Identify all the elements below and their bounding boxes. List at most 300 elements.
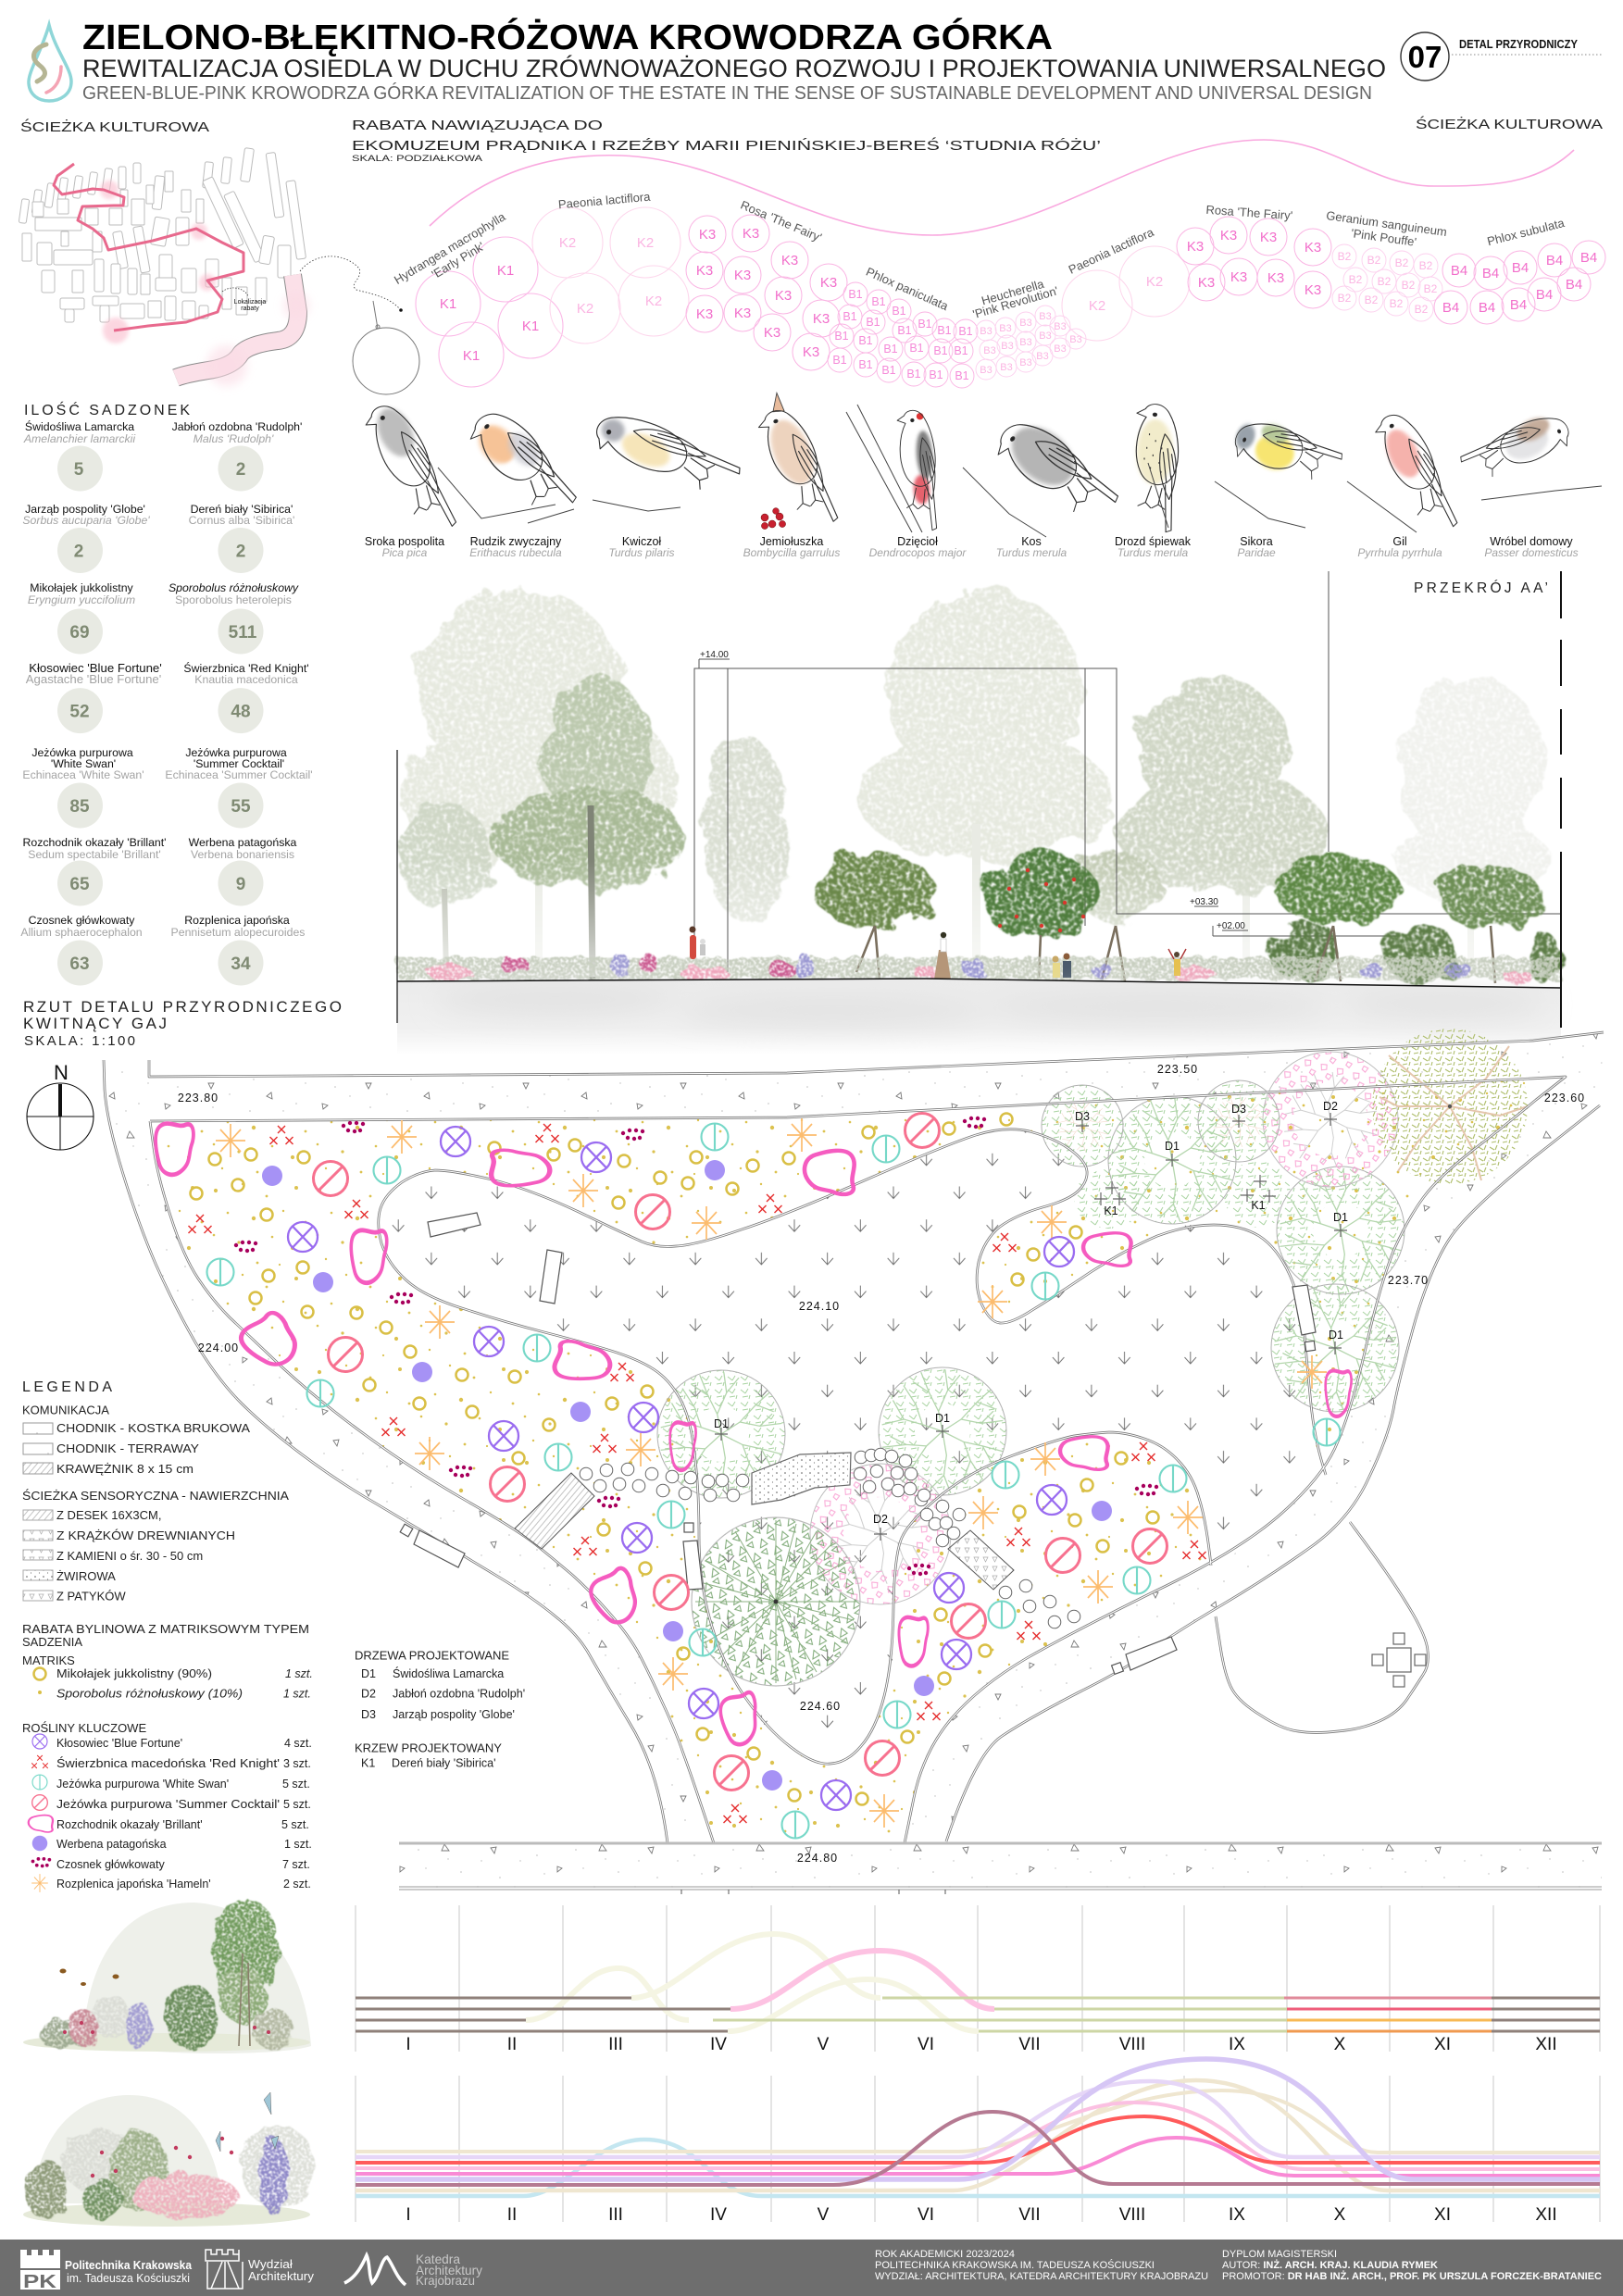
month labels: V bbox=[818, 2205, 830, 2225]
bed plan: planting circles: B3 bbox=[1001, 341, 1014, 352]
polish names: Werbena patagońska bbox=[189, 836, 296, 849]
planting codes: K1 bbox=[497, 263, 514, 279]
month labels: VII bbox=[1018, 2205, 1041, 2225]
month labels bbox=[406, 2205, 1557, 2225]
count numbers: 2 bbox=[236, 460, 245, 480]
month labels: X bbox=[1334, 2035, 1346, 2054]
heading: plan detail bbox=[23, 998, 342, 1049]
species names: Heucherella bbox=[980, 277, 1046, 307]
series bbox=[356, 2059, 1600, 2196]
latin names: Knautia macedonica bbox=[194, 673, 298, 686]
elevation labels: 223.70 bbox=[1388, 1274, 1429, 1287]
legend: RABATA BYLINOWA Z MATRIKSOWYM TYPEM bbox=[22, 1622, 309, 1636]
polish names: 'White Swan' bbox=[51, 757, 116, 770]
legend: Z DESEK 16X3CM, bbox=[56, 1508, 161, 1522]
north arrow: N bbox=[54, 1061, 69, 1084]
planting codes: K3 bbox=[734, 306, 751, 321]
legend: KOMUNIKACJA bbox=[22, 1404, 109, 1416]
bird: robin bbox=[465, 401, 581, 527]
bird: waxwing bbox=[749, 388, 843, 534]
logo: Wydzial Architektury: Architektury bbox=[248, 2269, 315, 2283]
legend: Werbena patagońska bbox=[56, 1838, 167, 1851]
month labels: I bbox=[406, 2205, 411, 2225]
planting codes: K3 bbox=[1198, 275, 1215, 291]
benches bbox=[400, 1213, 1316, 1674]
legend: 2 szt. bbox=[283, 1878, 311, 1890]
key plant legend icons bbox=[29, 1734, 53, 1892]
bird latin names: Turdus merula bbox=[1117, 546, 1189, 559]
south strip bbox=[399, 1843, 1602, 1894]
polish names: Sporobolus różnołuskowy bbox=[169, 581, 299, 594]
latin names: Sporobolus heterolepis bbox=[175, 593, 292, 606]
latin names bbox=[20, 432, 313, 939]
lawn with grass arrows bbox=[376, 1126, 1325, 1766]
logo: Wydzial Architektury: Wydział bbox=[248, 2257, 293, 2271]
bird: fieldfare bbox=[590, 404, 743, 505]
count numbers: 85 bbox=[69, 797, 90, 817]
pink hump bbox=[730, 1951, 994, 2009]
elevation labels: 223.60 bbox=[1544, 1092, 1585, 1104]
logo: Politechnika Krakowska bbox=[20, 2250, 193, 2292]
bars autumn colours bbox=[1284, 1998, 1492, 2031]
planting codes: B4 bbox=[1512, 260, 1529, 276]
planting codes: K3 bbox=[813, 311, 830, 327]
polish names: Rozplenica japońska bbox=[184, 914, 290, 927]
keyhole circle bbox=[353, 301, 419, 394]
legend: Mikołajek jukkolistny (90%) bbox=[56, 1667, 212, 1680]
tree codes: K1 bbox=[1104, 1204, 1118, 1217]
month labels: II bbox=[507, 2035, 517, 2054]
bed plan: planting circles: K2 bbox=[637, 235, 654, 251]
latin names: Echinacea 'White Swan' bbox=[22, 768, 144, 781]
legend: Jeżówka purpurowa 'Summer Cocktail' bbox=[56, 1798, 280, 1811]
month labels: XII bbox=[1535, 2205, 1557, 2225]
footer bbox=[0, 2240, 1623, 2296]
planting codes: K3 bbox=[1305, 282, 1321, 298]
planting codes: K3 bbox=[1187, 239, 1204, 255]
tree codes: D1 bbox=[1329, 1329, 1343, 1341]
branches bbox=[438, 463, 1602, 537]
bed plan: planting circles: B1 bbox=[954, 344, 968, 357]
month labels: VIII bbox=[1119, 2035, 1145, 2054]
footer text: DYPLOM MAGISTERSKI bbox=[1222, 2249, 1337, 2260]
polish names: Jeżówka purpurowa bbox=[31, 746, 133, 759]
section AA bbox=[397, 571, 1563, 1055]
count circles bbox=[57, 446, 263, 985]
levels bbox=[700, 650, 1245, 931]
logo: Katedra bbox=[344, 2252, 482, 2288]
location map: rabaty bbox=[241, 306, 259, 312]
species names: Paeonia lactiflora bbox=[1067, 225, 1156, 277]
bed plan: planting circles: B1 bbox=[848, 288, 863, 301]
legend: MATRIKS bbox=[22, 1653, 75, 1667]
planting codes bbox=[440, 226, 1597, 364]
count numbers: 55 bbox=[231, 797, 251, 817]
bed plan: planting circles: B2 bbox=[1367, 254, 1381, 267]
month labels: VII bbox=[1018, 2035, 1041, 2054]
legend: 1 szt. bbox=[283, 1688, 311, 1701]
month labels: XII bbox=[1535, 2035, 1557, 2054]
latin names: Cornus alba 'Sibirica' bbox=[189, 514, 294, 527]
bed plan: planting circles: B1 bbox=[937, 324, 952, 337]
month labels: I bbox=[406, 2035, 411, 2054]
legend: ŚCIEŻKA SENSORYCZNA - NAWIERZCHNIA bbox=[22, 1489, 289, 1503]
legend: 1 szt. bbox=[284, 1838, 312, 1851]
near trees bbox=[814, 853, 1563, 984]
bed plan: planting circles: B3 bbox=[1019, 337, 1032, 348]
month labels: IX bbox=[1229, 2035, 1245, 2054]
heading: cultural path left: ŚCIEŻKA KULTUROWA bbox=[20, 119, 209, 135]
legend bbox=[22, 1379, 313, 1892]
footer text bbox=[875, 2249, 1602, 2282]
species names: 'Pink Revolution' bbox=[971, 283, 1060, 321]
second trunk bbox=[444, 889, 446, 977]
elevation labels: 223.80 bbox=[178, 1092, 218, 1104]
bird names: Wróbel domowy bbox=[1490, 535, 1573, 548]
sensory path: stones bbox=[580, 1448, 1080, 1628]
legend: Z KAMIENI o śr. 30 - 50 cm bbox=[56, 1549, 203, 1563]
far trees bbox=[400, 588, 1551, 903]
bird latin names: Erithacus rubecula bbox=[469, 546, 562, 559]
bird latin names: Dendrocopos major bbox=[869, 546, 967, 559]
heading: plan detail: RZUT DETALU PRZYRODNICZEGO bbox=[23, 998, 342, 1016]
pale humps bbox=[526, 1934, 979, 2031]
K1 group bbox=[416, 237, 563, 387]
planting codes: B4 bbox=[1479, 300, 1495, 316]
polish names: Mikołajek jukkolistny bbox=[30, 581, 134, 594]
illustration: spring planting bbox=[23, 1898, 311, 2053]
species names: Phlox paniculata bbox=[864, 265, 951, 313]
bed plan: planting circles: B1 bbox=[883, 343, 898, 356]
bird names: Jemiołuszka bbox=[760, 535, 823, 548]
bed plan: planting circles: B1 bbox=[858, 334, 873, 347]
latin names: Verbena bonariensis bbox=[191, 848, 294, 861]
legend: CHODNIK - TERRAWAY bbox=[56, 1441, 199, 1455]
sensory path: gravel bbox=[752, 1453, 851, 1504]
bird: tit bbox=[1230, 414, 1345, 491]
bed plan: planting circles: B3 bbox=[1039, 331, 1052, 342]
planting codes: K1 bbox=[440, 296, 456, 312]
legend: trees and shrubs: Dereń biały 'Sibirica' bbox=[392, 1757, 495, 1770]
mist overlay bbox=[398, 861, 1560, 977]
Swierzbnica red crosses bbox=[189, 1124, 1205, 1823]
Klosowiec purple bbox=[288, 1127, 1074, 1810]
bed plan: planting circles: B3 bbox=[1054, 343, 1067, 355]
matrix plants rings bbox=[191, 1113, 1159, 1805]
legend: trees and shrubs: Świdośliwa Lamarcka bbox=[393, 1666, 504, 1680]
species names: Geranium sanguineum bbox=[1325, 208, 1448, 239]
far trunks bbox=[535, 824, 1474, 977]
species names bbox=[392, 190, 1567, 321]
bird names: Sikora bbox=[1240, 535, 1273, 548]
elevation labels: 224.60 bbox=[800, 1700, 841, 1713]
birds bbox=[361, 388, 1602, 559]
legend: 3 szt. bbox=[283, 1757, 311, 1770]
logo: drop bbox=[29, 25, 71, 101]
plan view bbox=[104, 1029, 1604, 1894]
logo: Politechnika Krakowska: Politechnika Krakowska bbox=[65, 2258, 193, 2272]
grid bbox=[356, 2076, 1600, 2222]
month labels: III bbox=[608, 2035, 623, 2054]
B2 group bbox=[1332, 244, 1442, 321]
bird latin names: Passer domesticus bbox=[1484, 546, 1579, 559]
bed plan: planting circles: K2 bbox=[1146, 274, 1163, 290]
bed plan: planting circles: B1 bbox=[866, 316, 880, 329]
species names: Paeonia lactiflora bbox=[557, 190, 652, 211]
legend: Sporobolus różnołuskowy (10%) bbox=[56, 1688, 243, 1701]
count numbers: 65 bbox=[69, 875, 90, 894]
legend: trees and shrubs: D1 bbox=[361, 1667, 376, 1680]
logo: Katedra: Krajobrazu bbox=[416, 2273, 475, 2288]
planting codes: K3 bbox=[1220, 228, 1237, 243]
planting codes: K3 bbox=[696, 306, 713, 322]
polish names: Świdośliwa Lamarcka bbox=[25, 419, 134, 433]
planting codes: K3 bbox=[1230, 269, 1247, 285]
bed plan: planting circles: B3 bbox=[1000, 362, 1013, 373]
mid tree trunk bbox=[591, 805, 593, 980]
Werbena filled circles bbox=[262, 1160, 1112, 1791]
legend: trees and shrubs: KRZEW PROJEKTOWANY bbox=[355, 1741, 502, 1755]
month labels: XI bbox=[1434, 2035, 1451, 2054]
bird names: Kos bbox=[1021, 535, 1042, 548]
month labels: X bbox=[1334, 2205, 1346, 2225]
title block: GREEN-BLUE-PINK KROWODRZA GÓRKA REVITALIZATION OF THE ESTATE IN THE SENSE OF SUSTAINABLE DEVELOPMENT AND UNIVERSAL DESIGN bbox=[82, 82, 1372, 104]
month labels: VI bbox=[918, 2205, 934, 2225]
tree codes: D1 bbox=[714, 1417, 729, 1430]
illustration: summer planting bbox=[23, 2092, 315, 2227]
latin names: Echinacea 'Summer Cocktail' bbox=[165, 768, 313, 781]
board number badge: 07 bbox=[1408, 40, 1442, 74]
month labels: IV bbox=[710, 2205, 727, 2225]
polish names: Czosnek główkowaty bbox=[29, 914, 135, 927]
legend: 5 szt. bbox=[281, 1818, 309, 1831]
legend: 5 szt. bbox=[283, 1798, 311, 1811]
bed plan: planting circles: B1 bbox=[834, 330, 849, 343]
olive tree top right bbox=[1372, 1029, 1528, 1184]
Jezowka White Swan bbox=[207, 1124, 1341, 1839]
tree codes: D2 bbox=[1323, 1100, 1338, 1113]
elevation labels bbox=[178, 1063, 1585, 1865]
count numbers: 48 bbox=[231, 703, 251, 722]
chart: bloom calendar bottom bbox=[356, 2059, 1600, 2225]
bird: sparrow bbox=[1457, 407, 1574, 489]
latin names: Sedum spectabile 'Brillant' bbox=[28, 848, 161, 861]
logo: Katedra: Katedra bbox=[416, 2252, 460, 2266]
heading: flower bed: SKALA: PODZIAŁKOWA bbox=[352, 154, 483, 164]
bed plan: planting circles: B2 bbox=[1395, 256, 1409, 269]
Rozplenica stars bbox=[216, 1118, 1327, 1828]
legend: trees and shrubs: D2 bbox=[361, 1688, 376, 1701]
species names: 'Pink Pouffe' bbox=[1350, 226, 1417, 249]
bird latin names: Pyrrhula pyrrhula bbox=[1357, 546, 1442, 559]
bed plan: planting circles: B1 bbox=[909, 342, 924, 355]
month labels bbox=[406, 2035, 1557, 2054]
bed plan: planting circles: B2 bbox=[1365, 293, 1379, 306]
bed plan: planting circles: B2 bbox=[1402, 279, 1416, 292]
legend: CHODNIK - KOSTKA BRUKOWA bbox=[56, 1421, 250, 1435]
bed plan: planting circles: B3 bbox=[999, 323, 1012, 334]
species names: 'Early Pink' bbox=[430, 239, 487, 281]
bed plan: planting circles: B1 bbox=[906, 368, 921, 381]
legend: Czosnek główkowaty bbox=[56, 1858, 165, 1871]
bed plan: planting circles: B1 bbox=[955, 369, 969, 382]
bird names: Sroka pospolita bbox=[365, 535, 444, 548]
bed plan: planting circles: B2 bbox=[1338, 250, 1352, 263]
bed plan: planting circles: B3 bbox=[1039, 311, 1052, 322]
polish names: Jarząb pospolity 'Globe' bbox=[25, 503, 145, 516]
planting codes: K3 bbox=[803, 344, 819, 360]
bed plan: planting circles: B2 bbox=[1378, 275, 1392, 288]
Czosnek dots bbox=[234, 1117, 1158, 1576]
logo: Wydzial Architektury bbox=[206, 2250, 315, 2289]
planting codes: K3 bbox=[1305, 240, 1321, 256]
heading: plan detail: KWITNĄCY GAJ bbox=[23, 1015, 167, 1032]
board number badge: DETAL PRZYRODNICZY bbox=[1459, 38, 1579, 51]
legend: 7 szt. bbox=[282, 1858, 310, 1871]
month labels: IV bbox=[710, 2035, 727, 2054]
bed plan: planting circles bbox=[353, 140, 1605, 394]
count numbers: 9 bbox=[236, 875, 245, 894]
tree codes bbox=[714, 1100, 1348, 1526]
latin names: Amelanchier lamarckii bbox=[23, 432, 136, 445]
legend: Rozplenica japońska 'Hameln' bbox=[56, 1878, 211, 1890]
bed plan: planting circles: B1 bbox=[933, 344, 948, 357]
bed plan: planting circles: K2 bbox=[1089, 298, 1105, 314]
latin names: Pennisetum alopecuroides bbox=[171, 926, 305, 939]
K2 group bbox=[532, 207, 1190, 343]
swatches: communication bbox=[23, 1423, 53, 1474]
bed plan: planting circles: B2 bbox=[1419, 259, 1433, 272]
bird: woodpecker bbox=[896, 409, 941, 532]
trees D2 bbox=[810, 1052, 1398, 1604]
tree circles D1 bbox=[657, 1096, 1405, 1498]
planting codes: B4 bbox=[1536, 287, 1553, 303]
planting codes: K1 bbox=[463, 348, 480, 364]
panel: plant quantities bbox=[20, 401, 313, 985]
legend: trees and shrubs: K1 bbox=[361, 1757, 375, 1770]
title block: ZIELONO-BŁĘKITNO-RÓŻOWA KROWODRZA GÓRKA bbox=[82, 17, 1053, 57]
mid trees bbox=[398, 676, 1329, 922]
tree codes: D1 bbox=[935, 1412, 950, 1425]
species names: Rosa 'The Fairy' bbox=[739, 198, 824, 244]
cut lines bbox=[396, 750, 398, 1023]
big triangle-leaf tree bbox=[692, 1517, 860, 1686]
B4 group bbox=[1434, 241, 1605, 324]
Rozchodnik blobs bbox=[156, 1124, 1352, 1749]
bed plan: planting circles: B1 bbox=[918, 318, 932, 331]
bed plan: planting circles: B1 bbox=[881, 364, 896, 377]
planting codes: B4 bbox=[1510, 297, 1527, 313]
count numbers: 5 bbox=[74, 460, 84, 480]
count numbers: 2 bbox=[236, 543, 245, 561]
trunk bbox=[846, 405, 922, 532]
elevation labels: 223.50 bbox=[1157, 1063, 1198, 1076]
polish names bbox=[22, 419, 309, 927]
planting codes: B4 bbox=[1546, 253, 1563, 268]
planting codes: K3 bbox=[781, 253, 798, 268]
planting codes: K3 bbox=[764, 325, 780, 341]
sidewalk and bed edges bbox=[104, 1032, 1604, 1843]
planting codes: K1 bbox=[522, 318, 539, 334]
bird: bullfinch bbox=[1372, 406, 1462, 540]
polish names: Jeżówka purpurowa bbox=[185, 746, 287, 759]
bed plan: planting circles: B1 bbox=[871, 295, 886, 308]
month labels: III bbox=[608, 2205, 623, 2225]
species names: Rosa 'The Fairy' bbox=[1205, 203, 1293, 222]
polish names: Jabłoń ozdobna 'Rudolph' bbox=[172, 420, 302, 433]
month labels: VIII bbox=[1119, 2205, 1145, 2225]
trees D1 bbox=[657, 1096, 1405, 1498]
count numbers bbox=[69, 460, 257, 974]
wave line bbox=[430, 140, 1574, 235]
elevation labels: 224.10 bbox=[799, 1300, 840, 1313]
B1 group bbox=[828, 282, 978, 388]
bird latin names: Turdus merula bbox=[996, 546, 1067, 559]
planting codes: K3 bbox=[696, 263, 713, 279]
count numbers: 52 bbox=[69, 703, 90, 722]
latin names: Agastache 'Blue Fortune' bbox=[26, 672, 161, 686]
footer text: WYDZIAŁ: ARCHITEKTURA, KATEDRA ARCHITEKTURY KRAJOBRAZU bbox=[875, 2271, 1208, 2282]
footer text: PROMOTOR: DR HAB INŻ. ARCH., PROF. PK URSZULA FORCZEK-BRATANIEC bbox=[1222, 2270, 1602, 2282]
bed plan: planting circles: B3 bbox=[1019, 357, 1032, 368]
bars green bbox=[713, 1998, 1287, 2031]
bird names: Drozd śpiewak bbox=[1115, 535, 1192, 548]
ground bbox=[397, 979, 1561, 1055]
sensory path: sticks bbox=[948, 1530, 1014, 1590]
count numbers: 2 bbox=[74, 543, 83, 561]
legend: LEGENDA bbox=[22, 1379, 112, 1395]
elevation labels: 224.00 bbox=[198, 1341, 239, 1354]
board number badge bbox=[1401, 32, 1604, 81]
bed plan: planting circles: B3 bbox=[983, 345, 996, 356]
planting codes: B4 bbox=[1566, 277, 1582, 293]
levels: +03.30 bbox=[1190, 897, 1218, 907]
ground line bbox=[397, 979, 1561, 988]
levels: +02.00 bbox=[1217, 921, 1245, 931]
count numbers: 34 bbox=[231, 955, 251, 974]
panel: plant quantities: ILOŚĆ SADZONEK bbox=[24, 401, 193, 418]
bed plan: planting circles: B2 bbox=[1424, 282, 1438, 295]
bed plan: planting circles: B3 bbox=[1069, 334, 1082, 345]
bed plan: planting circles: B1 bbox=[958, 325, 973, 338]
legend: KRAWĘŻNIK 8 x 15 cm bbox=[56, 1462, 194, 1476]
shrubs K1 bbox=[1074, 1161, 1291, 1229]
month labels: VI bbox=[918, 2035, 934, 2054]
sensory path: boards bbox=[515, 1473, 594, 1549]
terrace table bbox=[1372, 1633, 1426, 1687]
bed plan: planting circles: B1 bbox=[897, 324, 912, 337]
bed plan: planting circles: B2 bbox=[1415, 303, 1429, 316]
bed plan: planting circles: B1 bbox=[929, 368, 943, 381]
count numbers: 511 bbox=[229, 623, 257, 643]
figures bbox=[689, 926, 1186, 980]
legend: Z KRĄŻKÓW DREWNIANYCH bbox=[56, 1529, 235, 1542]
legend: SADZENIA bbox=[22, 1635, 82, 1649]
berries bbox=[761, 508, 786, 530]
heading: section: PRZEKRÓJ AA’ bbox=[1414, 580, 1550, 596]
legend: trees and shrubs: DRZEWA PROJEKTOWANE bbox=[355, 1648, 509, 1663]
bed dots bbox=[150, 1077, 1566, 1843]
tree codes: D2 bbox=[873, 1513, 888, 1526]
legend: trees and shrubs: Jabłoń ozdobna 'Rudolph' bbox=[393, 1688, 525, 1701]
heading: flower bed: RABATA NAWIĄZUJĄCA DO bbox=[352, 118, 603, 133]
legend: trees and shrubs bbox=[355, 1648, 525, 1770]
levels: +14.00 bbox=[700, 650, 729, 660]
north arrow bbox=[27, 1061, 94, 1150]
trees D3 bbox=[1042, 1080, 1280, 1167]
bird names: Dzięcioł bbox=[897, 535, 938, 548]
bed plan: planting circles: B1 bbox=[843, 310, 857, 323]
